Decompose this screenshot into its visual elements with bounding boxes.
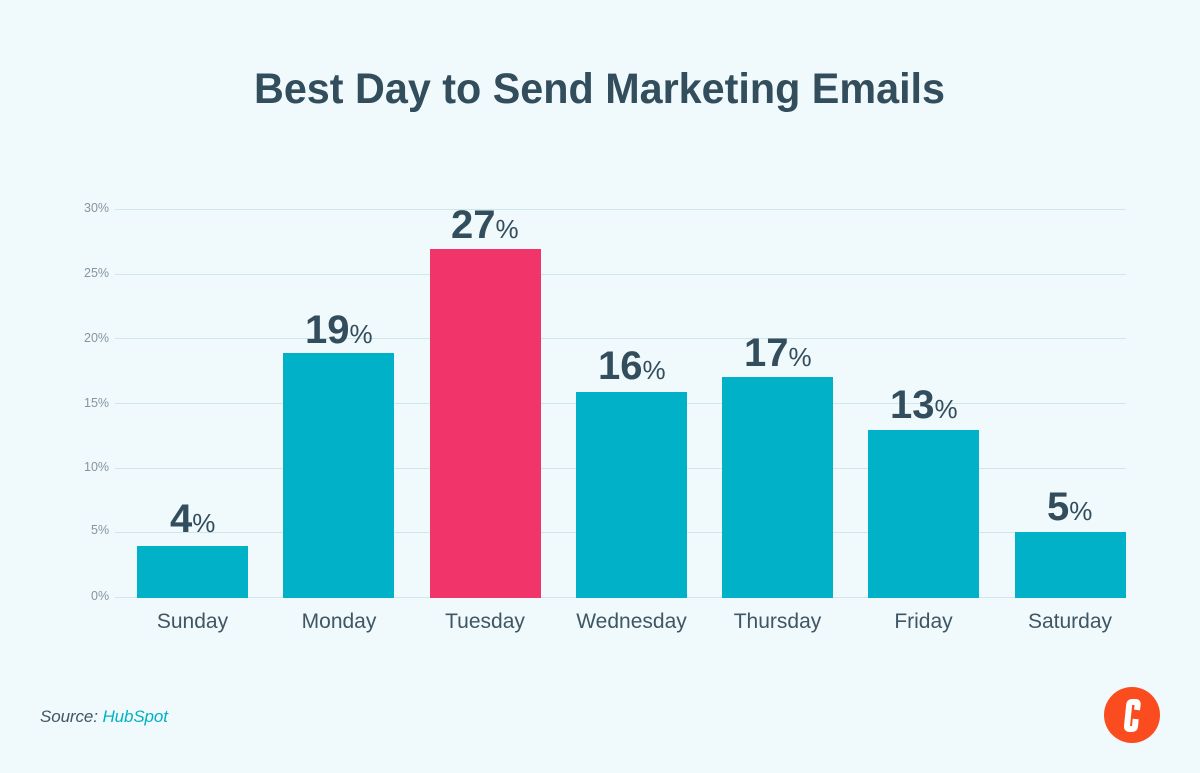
- bar: Thursday: [722, 331, 833, 633]
- title: Best Day to Send Marketing Emails: [254, 65, 945, 113]
- bar: Sunday: [137, 497, 248, 633]
- y axis labels: 15%: [84, 396, 109, 410]
- bar: Friday: 13%: [890, 383, 958, 427]
- y axis labels: 10%: [84, 460, 109, 474]
- bar: Saturday: 5%: [1047, 485, 1092, 529]
- bar: Tuesday: 27%: [451, 203, 519, 247]
- icon: logo: [1104, 687, 1160, 743]
- bar: Thursday: Thursday: [734, 610, 822, 633]
- bar: Monday: Monday: [302, 610, 377, 633]
- bar: Friday: [868, 383, 979, 633]
- source note: Source: HubSpot: [40, 707, 169, 726]
- y axis labels: [84, 201, 109, 603]
- bar: Friday: Friday: [894, 610, 953, 633]
- bar: Thursday: 17%: [744, 331, 812, 375]
- y axis labels: 5%: [91, 523, 109, 537]
- y axis labels: 20%: [84, 331, 109, 345]
- bar: Tuesday: [430, 203, 541, 633]
- bar: Wednesday: [576, 344, 687, 633]
- y axis labels: 0%: [91, 589, 109, 603]
- y axis labels: 30%: [84, 201, 109, 215]
- bar: Saturday: Saturday: [1028, 610, 1113, 633]
- bar: Monday: [283, 308, 394, 633]
- bar: Wednesday: 16%: [598, 344, 666, 388]
- bar: Saturday: [1015, 485, 1126, 633]
- bar: Sunday: 4%: [170, 497, 215, 541]
- bar: Tuesday: Tuesday: [445, 610, 525, 633]
- bar chart: [84, 201, 1126, 633]
- bar: Sunday: Sunday: [157, 610, 229, 633]
- bar: Wednesday: Wednesday: [576, 610, 687, 633]
- bar: Monday: 19%: [305, 308, 373, 352]
- y axis labels: 25%: [84, 266, 109, 280]
